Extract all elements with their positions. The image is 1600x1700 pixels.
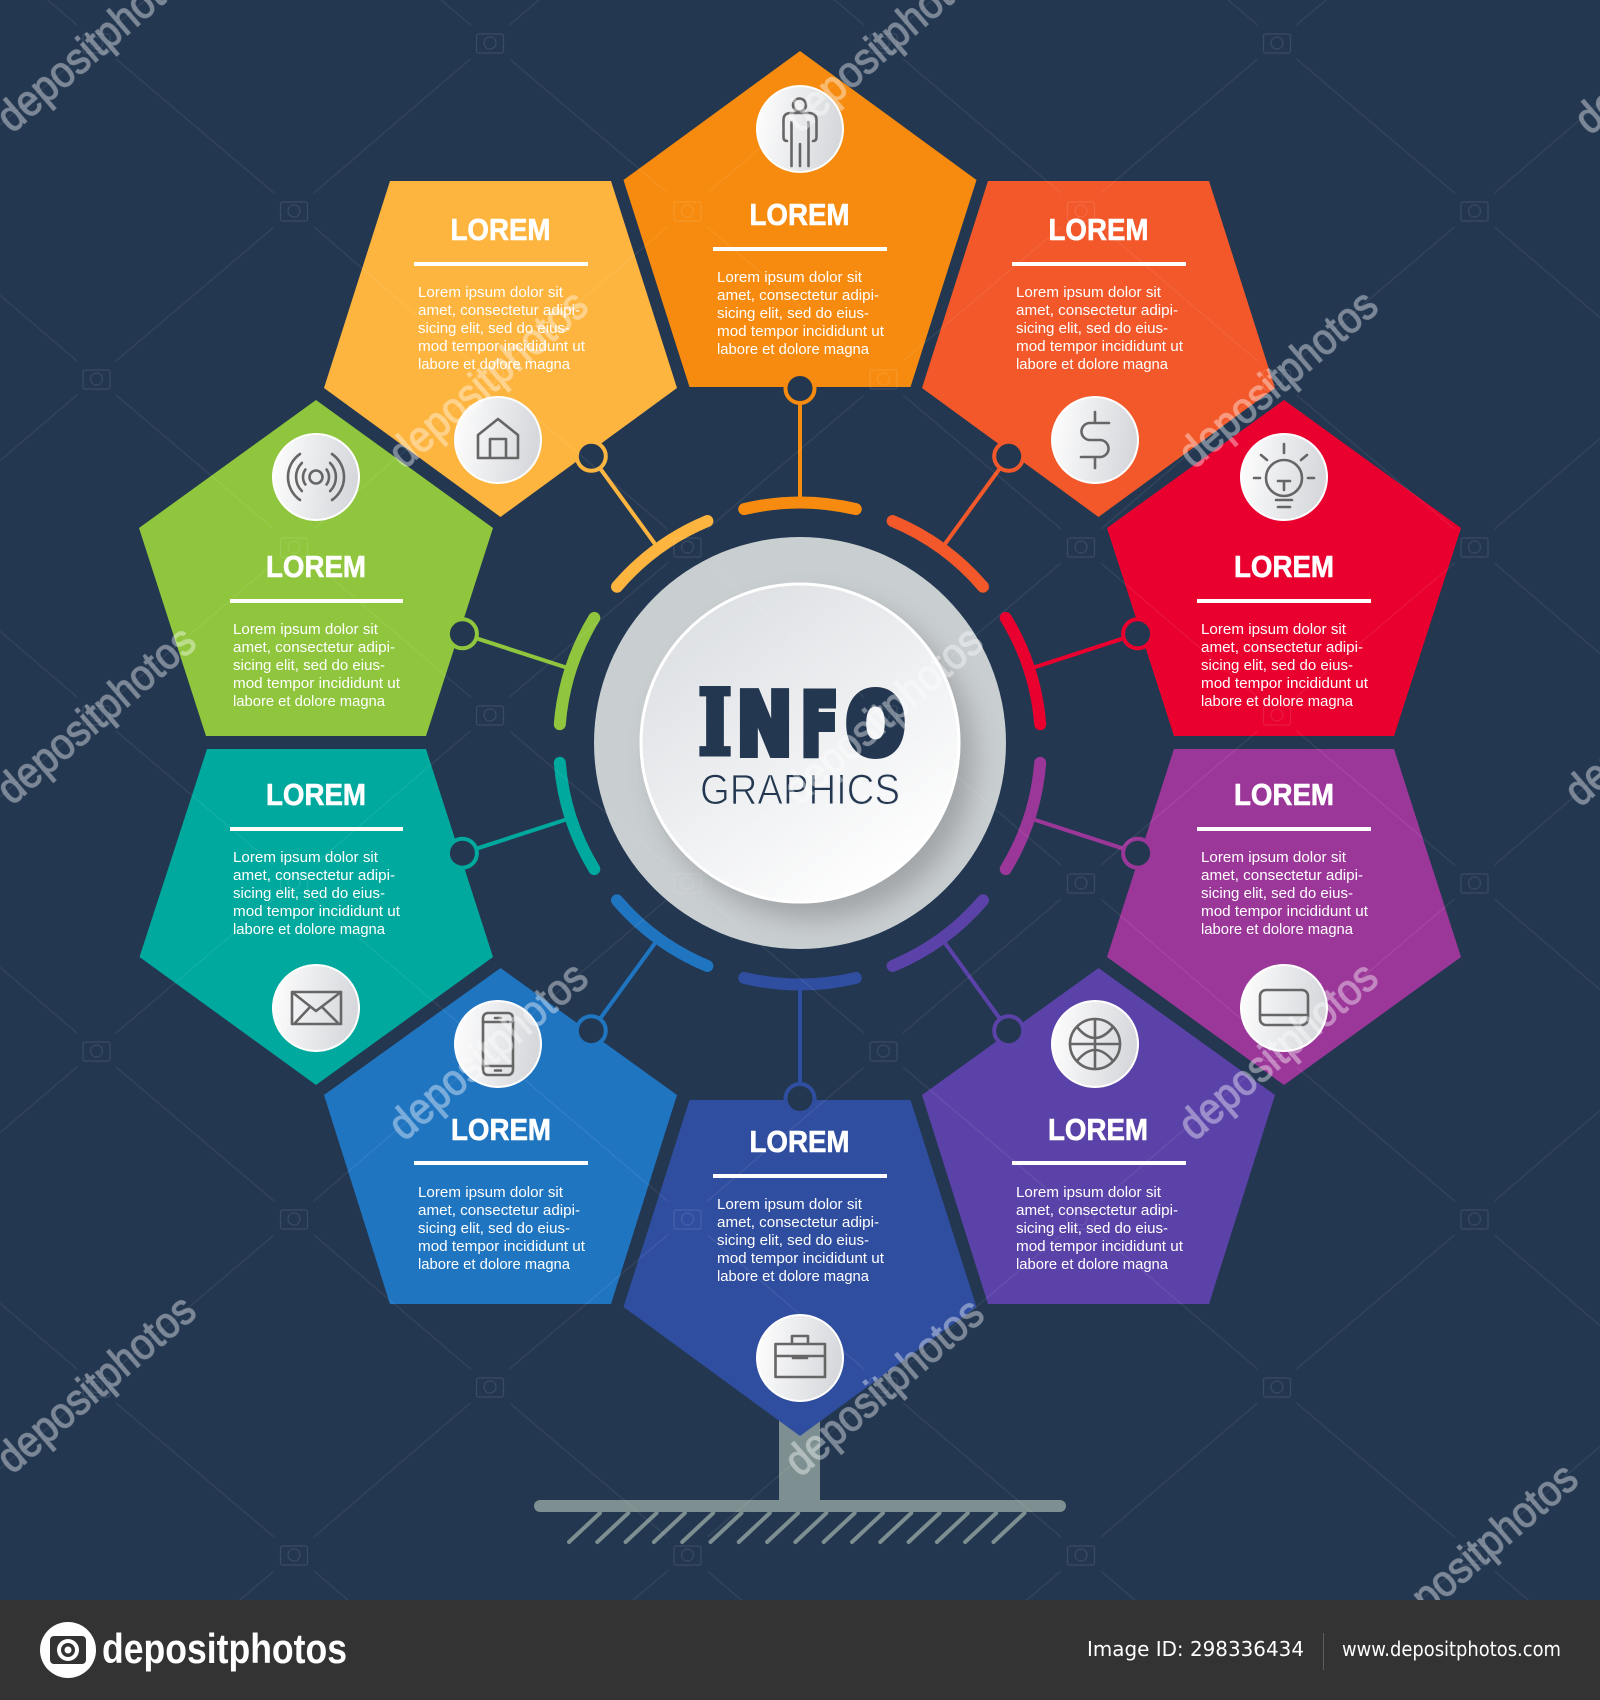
text block: mod tempor incididunt ut — [233, 903, 401, 920]
text block: labore et dolore magna — [717, 341, 870, 358]
icon: phone — [455, 1001, 541, 1087]
text block: labore et dolore magna — [1016, 1256, 1169, 1273]
text block: amet, consectetur adipi- — [233, 867, 395, 884]
logo: camera badge — [40, 1622, 96, 1678]
heading: LOREM — [750, 197, 850, 232]
text block: sicing elit, sed do eius- — [233, 885, 385, 902]
text block — [717, 1196, 885, 1285]
stand and ground — [534, 1420, 1066, 1542]
text block: amet, consectetur adipi- — [418, 302, 580, 319]
text block: sicing elit, sed do eius- — [1016, 1220, 1168, 1237]
text block — [418, 284, 586, 373]
icon: basketball — [1052, 1001, 1138, 1087]
watermark text: depositphotos — [379, 280, 597, 478]
icon: briefcase — [757, 1315, 843, 1401]
text block: mod tempor incididunt ut — [233, 675, 401, 692]
text block: amet, consectetur adipi- — [1201, 867, 1363, 884]
panel: violet — [922, 968, 1275, 1304]
icon: person — [757, 86, 843, 172]
heading: LOREM — [451, 1112, 551, 1147]
text block: mod tempor incididunt ut — [1201, 903, 1369, 920]
text block: Lorem ipsum dolor sit — [233, 621, 379, 638]
text block: amet, consectetur adipi- — [1016, 302, 1178, 319]
text block: Lorem ipsum dolor sit — [717, 1196, 863, 1213]
text block: mod tempor incididunt ut — [418, 1238, 586, 1255]
icon: envelope — [273, 965, 359, 1051]
text block: sicing elit, sed do eius- — [418, 320, 570, 337]
text block: Lorem ipsum dolor sit — [418, 1184, 564, 1201]
panel: yellow — [324, 181, 677, 517]
text block: amet, consectetur adipi- — [418, 1202, 580, 1219]
text block — [1201, 849, 1369, 938]
text block: sicing elit, sed do eius- — [717, 305, 869, 322]
text block — [717, 269, 885, 358]
panel: red — [1107, 400, 1461, 736]
heading: LOREM — [1234, 777, 1334, 812]
panel: blue — [324, 968, 677, 1304]
image id: Image ID: 298336434 — [1087, 1637, 1304, 1661]
text block: labore et dolore magna — [418, 1256, 571, 1273]
text block: labore et dolore magna — [717, 1268, 870, 1285]
text block: labore et dolore magna — [1201, 921, 1354, 938]
text block: amet, consectetur adipi- — [233, 639, 395, 656]
watermark text: depositphotos — [1169, 280, 1387, 478]
text block: sicing elit, sed do eius- — [1201, 885, 1353, 902]
panel: orange top — [624, 51, 976, 387]
panel: dark blue bottom — [624, 1100, 976, 1436]
text block — [418, 1184, 586, 1273]
watermark text: depositphotos — [774, 616, 992, 814]
text block: amet, consectetur adipi- — [1016, 1202, 1178, 1219]
title: INFO — [698, 670, 905, 776]
title: INFO: F — [801, 676, 838, 775]
watermark text: depositphotos — [379, 952, 597, 1150]
text block: sicing elit, sed do eius- — [717, 1232, 869, 1249]
watermark text: depositphotos — [1169, 952, 1387, 1150]
heading: LOREM — [450, 212, 550, 247]
text block: Lorem ipsum dolor sit — [717, 269, 863, 286]
text block: mod tempor incididunt ut — [1016, 1238, 1184, 1255]
text block: labore et dolore magna — [233, 693, 386, 710]
text block: Lorem ipsum dolor sit — [1201, 849, 1347, 866]
text block: sicing elit, sed do eius- — [418, 1220, 570, 1237]
heading: LOREM — [1048, 1112, 1148, 1147]
panel: green — [139, 400, 493, 736]
logo text: depositphotos — [102, 1625, 347, 1672]
center disc — [594, 537, 1006, 949]
connectors and arc ring — [448, 374, 1152, 1113]
website: www.depositphotos.com — [1342, 1637, 1561, 1661]
text block: Lorem ipsum dolor sit — [1016, 1184, 1162, 1201]
title: INFO: O — [846, 676, 905, 775]
text block: amet, consectetur adipi- — [717, 287, 879, 304]
text block: Lorem ipsum dolor sit — [418, 284, 564, 301]
icon: light bulb — [1241, 434, 1327, 520]
text block: Lorem ipsum dolor sit — [1016, 284, 1162, 301]
icon: dollar — [1052, 397, 1138, 483]
panel: teal — [140, 749, 493, 1085]
text block: mod tempor incididunt ut — [1016, 338, 1184, 355]
icon: signal — [273, 434, 359, 520]
text block: amet, consectetur adipi- — [1201, 639, 1363, 656]
footer bar — [0, 1600, 1600, 1700]
subtitle: GRAPHICS: GRAPHICS — [700, 766, 900, 814]
heading: LOREM — [1234, 549, 1334, 584]
text block — [233, 621, 401, 710]
text block: sicing elit, sed do eius- — [233, 657, 385, 674]
title: INFO: I — [698, 670, 732, 776]
text block: amet, consectetur adipi- — [717, 1214, 879, 1231]
text block: sicing elit, sed do eius- — [1016, 320, 1168, 337]
text block: labore et dolore magna — [1201, 693, 1354, 710]
text block: Lorem ipsum dolor sit — [233, 849, 379, 866]
text block — [233, 849, 401, 938]
text block — [1016, 284, 1184, 373]
text block: labore et dolore magna — [418, 356, 571, 373]
text block: sicing elit, sed do eius- — [1201, 657, 1353, 674]
panel: purple — [1107, 749, 1461, 1085]
text block: mod tempor incididunt ut — [717, 1250, 885, 1267]
text block: labore et dolore magna — [233, 921, 386, 938]
heading: LOREM — [1048, 212, 1148, 247]
text block: mod tempor incididunt ut — [1201, 675, 1369, 692]
panel: red-orange — [922, 181, 1275, 517]
icon: tablet — [1241, 965, 1327, 1051]
watermark text: depositphotos — [775, 1288, 993, 1486]
text block: Lorem ipsum dolor sit — [1201, 621, 1347, 638]
icon: house — [455, 397, 541, 483]
text block: mod tempor incididunt ut — [418, 338, 586, 355]
heading: LOREM — [266, 777, 366, 812]
text block: mod tempor incididunt ut — [717, 323, 885, 340]
heading: LOREM — [266, 549, 366, 584]
text block — [1201, 621, 1369, 710]
text block — [1016, 1184, 1184, 1273]
heading: LOREM — [750, 1124, 850, 1159]
title: INFO: N — [737, 676, 792, 775]
text block: labore et dolore magna — [1016, 356, 1169, 373]
